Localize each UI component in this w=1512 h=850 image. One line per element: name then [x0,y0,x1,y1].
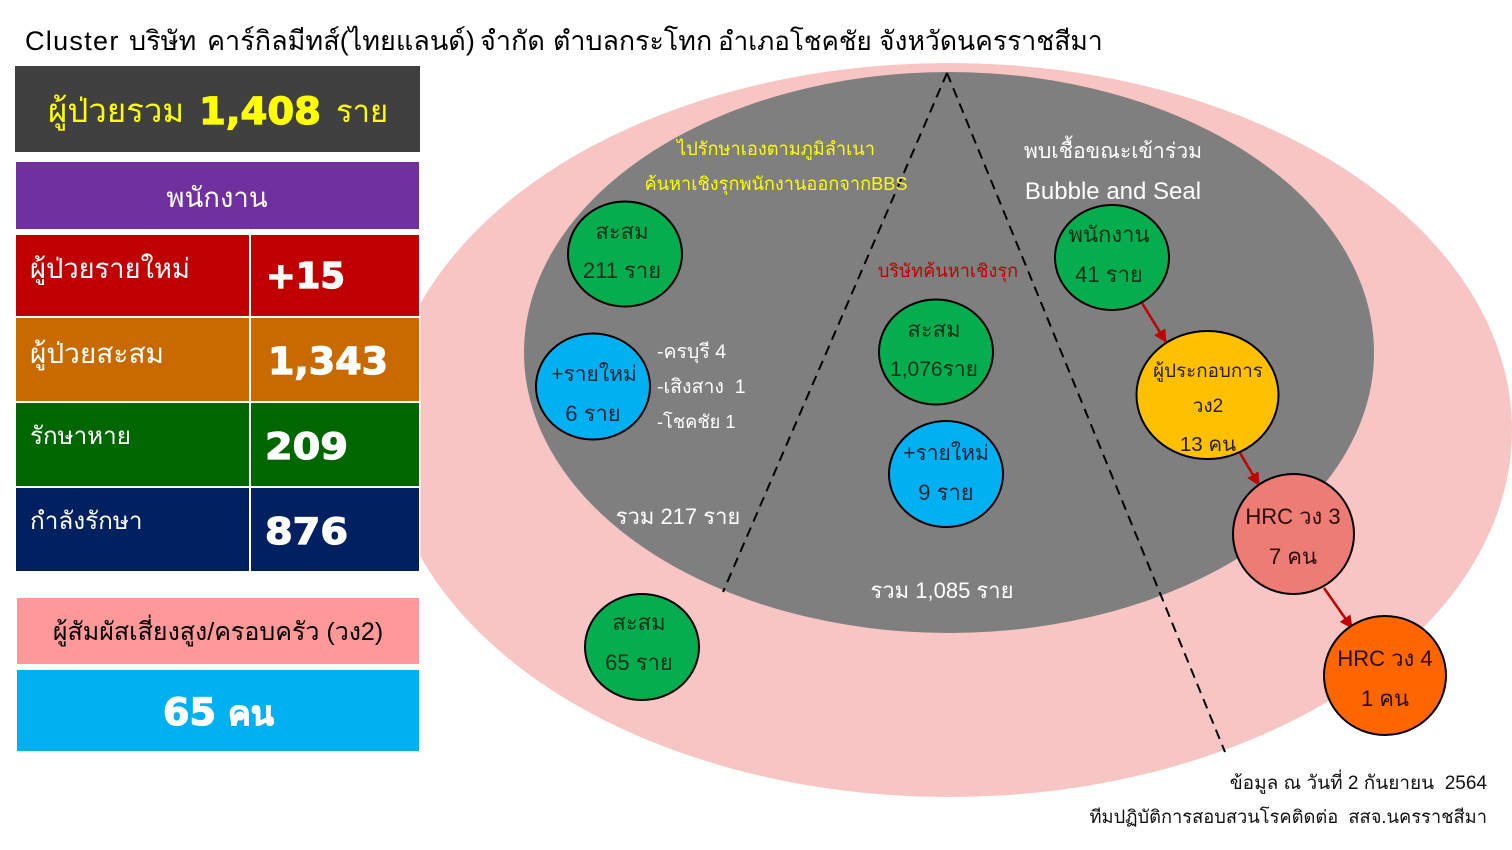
text: data source note [1089,769,1487,827]
title: อำเภอโชคชัย [718,26,872,56]
circle: operators ring 2: 13 คน [1180,433,1236,456]
panel: high-risk contacts heading [17,598,419,664]
outer pink ellipse: high-risk contacts zone [386,63,1512,797]
arrow: operators to HRC ring 3 [1240,453,1259,485]
panel: total patients: ราย [336,94,388,129]
panel: total patients: 1,408 [199,90,321,133]
panel: total patients [15,66,420,152]
text: data source note: ข้อมูล ณ วันที่ 2 กันยายน 2564 [1230,769,1487,794]
text: left segment heading: ค้นหาเชิงรุกพนักงานออกจากBBS [644,174,908,196]
circle: operators ring 2 [1136,331,1278,459]
circle: cumulative 211: สะสม [595,219,649,244]
circle: operators ring 2: วง2 [1193,396,1223,417]
circle: new 9 [889,421,1003,527]
title [25,25,1103,56]
title: จังหวัดนครราชสีมา [879,26,1103,56]
text: new-case district list [657,341,746,432]
row: new patients [16,235,419,316]
circle: employees 41: พนักงาน [1068,222,1150,247]
text: right segment heading [1024,135,1202,205]
row: new patients: +15 [266,256,345,297]
text: right segment heading: พบเชื้อขณะเข้าร่วม [1024,135,1202,163]
circle: HRC ring 3: 7 คน [1269,544,1317,569]
circle: HRC ring 4: 1 คน [1361,686,1409,711]
panel: employees table [16,162,419,571]
title: คาร์กิลมีทส์(ไทยแลนด์) [207,25,475,56]
circle: employees 41 [1055,205,1169,310]
row: cumulative patients: ผู้ป่วยสะสม [30,338,164,371]
title: Cluster [25,26,120,56]
row: cumulative patients [16,318,419,401]
arrow: HRC ring 3 to ring 4 [1324,588,1352,628]
circle: cumulative 211: 211 ราย [583,258,661,283]
row: under treatment: 876 [265,510,348,553]
circle: cumulative 211 [568,202,682,306]
text: new-case district list: -เสิงสาง 1 [657,376,746,398]
circle: new 6: 6 ราย [565,401,621,426]
circle: cumulative 1,076 [879,300,993,404]
row: recovered: รักษาหาย [30,423,131,450]
text: data source note: ทีมปฏิบัติการสอบสวนโรคติดต่อ สสจ.นครราชสีมา [1089,806,1487,827]
circle: contacts cumulative 65: สะสม [612,610,666,635]
row: cumulative patients: 1,343 [268,340,388,383]
circle: HRC ring 3: HRC วง 3 [1245,504,1341,529]
table header [16,162,419,229]
text: right segment heading: Bubble and Seal [1025,178,1201,205]
text: new-case district list: -ครบุรี 4 [657,341,726,364]
text: left segment total: รวม 217 ราย [616,504,740,529]
circle: contacts cumulative 65: 65 ราย [605,650,673,675]
inner grey ellipse: employees zone [524,72,1374,633]
title: จำกัด [480,26,545,56]
dashed divider lines [723,73,1225,752]
panel: high-risk contacts count: คน [228,695,274,733]
row: under treatment [16,488,419,571]
text: left segment heading [644,138,908,196]
circle: cumulative 1,076: 1,076ราย [890,358,978,381]
panel: high-risk contacts count [17,670,419,751]
panel: total patients: ผู้ป่วยรวม [48,92,184,131]
circle: employees 41: 41 ราย [1075,262,1143,287]
circle: new 9: +รายใหม่ [903,441,989,465]
row: recovered: 209 [265,425,348,468]
title: ตำบลกระโทก [553,26,712,56]
circle: HRC ring 4 [1324,616,1446,735]
table header: พนักงาน [166,182,268,213]
circle: new 6 [536,334,650,440]
circle: cumulative 1,076: สะสม [907,317,961,342]
circle: new 9: 9 ราย [918,480,974,505]
circle: contacts cumulative 65 [585,594,699,700]
panel: high-risk contacts count: 65 [163,691,216,734]
circle: HRC ring 3 [1233,474,1354,594]
row: under treatment: กำลังรักษา [30,508,143,535]
circle: operators ring 2: ผู้ประกอบการ [1153,360,1263,382]
circle: new 6: +รายใหม่ [551,362,637,386]
text: new-case district list: -โชคชัย 1 [657,411,736,432]
arrow: employees to operators [1142,303,1166,342]
text: left segment heading: ไปรักษาเองตามภูมิลำเนา [675,138,875,160]
panel: high-risk contacts heading: ผู้สัมผัสเสี่ยงสูง/ครอบครัว (วง2) [53,614,383,647]
text: centre segment heading: บริษัทค้นหาเชิงรุก [878,261,1018,283]
circle: HRC ring 4: HRC วง 4 [1337,646,1433,671]
row: recovered [16,403,419,486]
row: new patients: ผู้ป่วยรายใหม่ [30,253,190,285]
title: บริษัท [129,26,196,56]
text: centre segment total: รวม 1,085 ราย [870,578,1014,603]
